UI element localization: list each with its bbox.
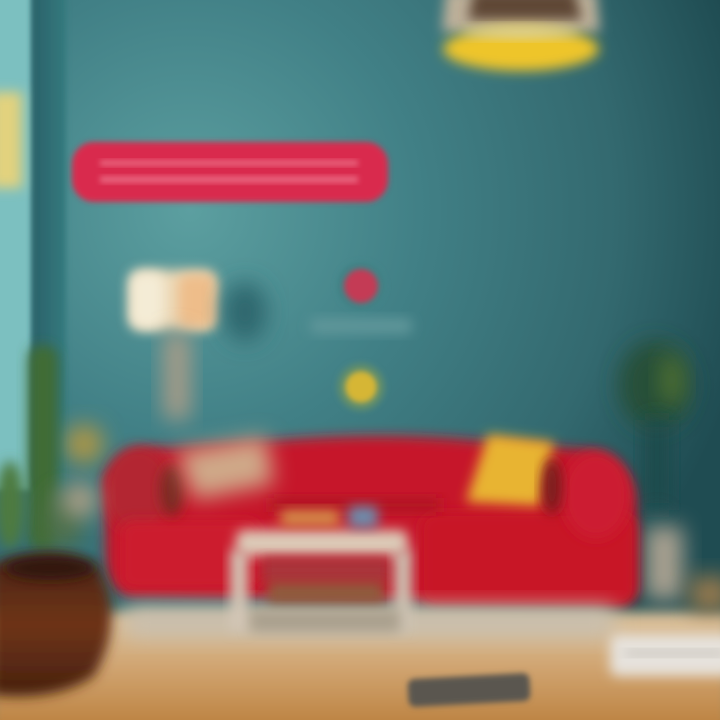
red dot (337, 262, 385, 310)
right plant (619, 341, 691, 600)
flower pot (0, 554, 112, 697)
left cactus plant (0, 345, 98, 550)
coffee table (230, 506, 412, 632)
pendant lamp (442, 0, 600, 71)
yellow dot (337, 363, 385, 411)
red sofa (104, 436, 636, 606)
remote control (407, 673, 531, 707)
floor (0, 576, 720, 720)
faint caption (310, 318, 412, 334)
title banner (72, 142, 388, 202)
left window strip and column (0, 0, 66, 490)
papers on floor (610, 634, 720, 676)
wall lamp (130, 270, 267, 420)
wall accent behind sofa (64, 424, 104, 464)
yellow cushion (466, 434, 562, 514)
beige cushion (160, 436, 274, 516)
